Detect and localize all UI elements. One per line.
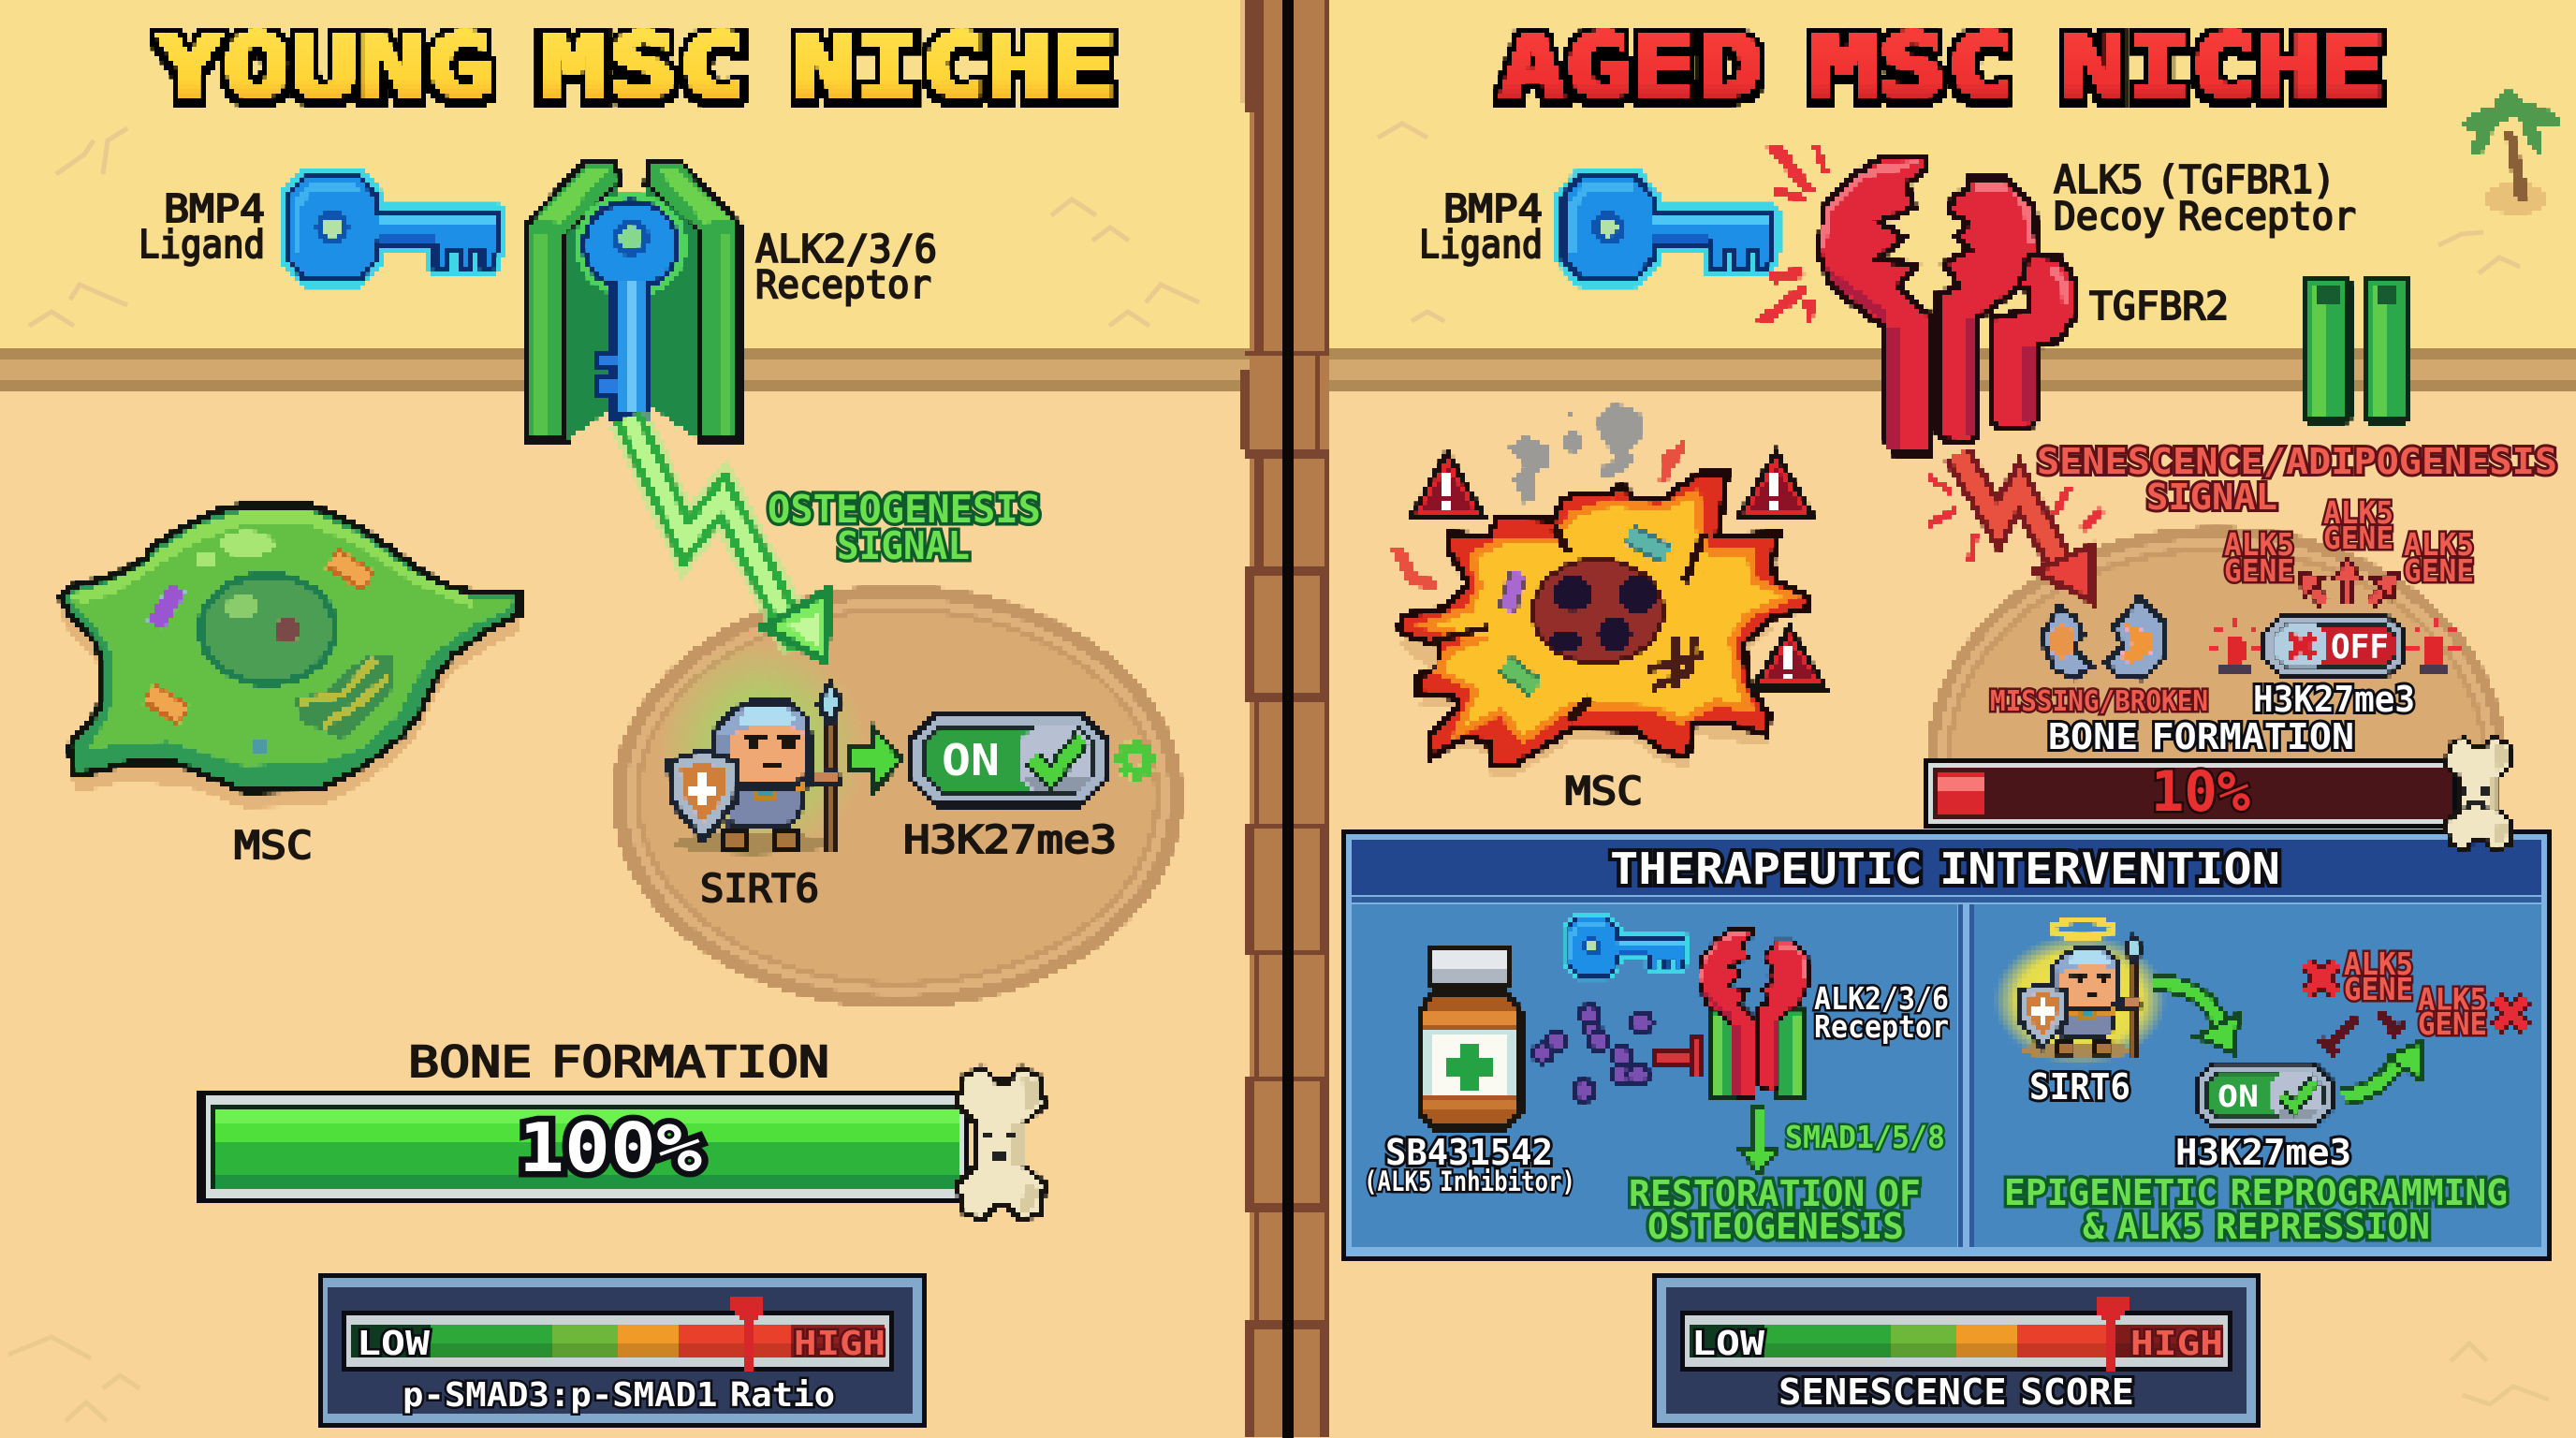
icon: gear bbox=[1114, 738, 1157, 781]
panel: young MSC niche bbox=[60, 16, 1183, 1429]
aged artwork layer bbox=[1392, 16, 2563, 1429]
label: ALK5 gene: ALK5 bbox=[2344, 946, 2413, 982]
aged labels layer: Ligand bbox=[1419, 222, 1543, 267]
label: H3K27me3: H3K27me3 bbox=[903, 817, 1117, 862]
label: H3K27me3: H3K27me3 bbox=[2175, 1132, 2351, 1173]
title: young MSC niche bbox=[155, 16, 1117, 116]
therapy labels layer: (ALK5 Inhibitor) bbox=[1364, 1166, 1575, 1197]
title: young MSC niche: YOUNG bbox=[155, 16, 493, 116]
label: epigenetic reprogramming: EPIGENETIC REPROGRAMMING bbox=[2004, 1172, 2508, 1213]
label: missing/broken: MISSING/BROKEN bbox=[1990, 685, 2208, 718]
therapy labels layer: OSTEOGENESIS bbox=[1647, 1206, 1904, 1247]
icon: warning triangle left bbox=[1407, 447, 1488, 520]
label: ALK5 gene right: ALK5 bbox=[2404, 526, 2474, 563]
icon: BMP4 key small bbox=[1567, 917, 1685, 976]
label: ALK5 gene middle: ALK5 bbox=[2323, 494, 2393, 531]
arrow: to SMAD1/5/8 bbox=[1739, 1107, 1778, 1174]
aged labels layer: GENE bbox=[2404, 552, 2474, 589]
therapy labels layer: GENE bbox=[2344, 971, 2413, 1007]
toggle: H3K27me3 off bbox=[2262, 613, 2408, 679]
label: SIRT6: SIRT6 bbox=[2029, 1066, 2130, 1108]
label: OFF: OFF bbox=[2331, 628, 2389, 667]
label: restoration of osteogenesis: RESTORATION OF bbox=[1629, 1173, 1921, 1214]
icon: palm tree bbox=[2460, 91, 2563, 214]
wooden divider bbox=[1239, 0, 1331, 1438]
icon: alarm left bbox=[2209, 618, 2261, 674]
icon: SIRT6 guardian bbox=[666, 677, 845, 855]
gauge: senescence score bbox=[1653, 1272, 2261, 1429]
icon: ALK2/3/6 receptor with key bbox=[526, 161, 739, 440]
gauge caption: SENESCENCE SCORE bbox=[1778, 1372, 2134, 1413]
therapy labels layer: & ALK5 REPRESSION bbox=[2083, 1206, 2430, 1247]
divider centre line bbox=[1282, 0, 1294, 1438]
label: bone formation: BONE FORMATION bbox=[408, 1037, 829, 1087]
icon: impact sparks bbox=[1755, 145, 1829, 326]
young labels layer: SIGNAL bbox=[837, 523, 970, 568]
aged labels layer: GENE bbox=[2224, 552, 2294, 589]
toggle: H3K27me3 on small bbox=[2194, 1061, 2334, 1130]
label: ALK5 decoy receptor: ALK5 (TGFBR1) bbox=[2054, 157, 2335, 202]
title: aged MSC niche: MSC bbox=[1809, 16, 2015, 116]
arrow: senescence signal lightning bbox=[1928, 454, 2101, 602]
title: aged MSC niche: AGED bbox=[1500, 16, 1763, 116]
title: young MSC niche: MSC bbox=[538, 16, 748, 116]
icon: broken SIRT6 pieces bbox=[2041, 597, 2166, 679]
label: ALK5 gene left: ALK5 bbox=[2224, 526, 2294, 563]
icon: warning triangle right bbox=[1734, 447, 1818, 520]
panel: therapeutic intervention bbox=[1341, 829, 2552, 1261]
icon: TGFBR2 receptor bbox=[1992, 256, 2075, 429]
icon: inhibitor molecules bbox=[1533, 1005, 1652, 1101]
title: aged MSC niche bbox=[1500, 16, 2385, 116]
label: receptor: ALK2/3/6 bbox=[1814, 980, 1949, 1017]
icon: BMP4 key bbox=[1563, 175, 1773, 280]
therapy artwork layer bbox=[1416, 917, 2525, 1174]
label: BMP4 ligand: BMP4 bbox=[1443, 186, 1543, 231]
gauge caption: p-SMAD3:p-SMAD1 Ratio bbox=[402, 1376, 835, 1415]
label: ON: ON bbox=[2217, 1078, 2259, 1114]
icon: SIRT6 halo aura bbox=[1994, 934, 2166, 1065]
icon: BMP4 key bbox=[287, 175, 497, 280]
icon: happy bone bbox=[957, 1067, 1045, 1221]
label: osteogenesis signal: OSTEOGENESIS bbox=[768, 487, 1041, 532]
label: SB431542: SB431542 bbox=[1385, 1132, 1553, 1173]
therapy labels layer: GENE bbox=[2418, 1005, 2487, 1042]
icon: up arrows bbox=[2298, 558, 2399, 604]
arrow: SIRT6 to H3K27me3 bbox=[2154, 983, 2239, 1053]
label: TGFBR2: TGFBR2 bbox=[2089, 284, 2229, 329]
label: toggle ON: ON bbox=[942, 735, 1000, 785]
bar: bone formation 100 percent bbox=[198, 1090, 970, 1204]
icon: SIRT6 halo bbox=[2053, 920, 2113, 937]
icon: warning triangle lower bbox=[1749, 623, 1830, 691]
therapy heading: THERAPEUTIC INTERVENTION bbox=[1610, 844, 2280, 894]
panel: aged MSC niche bbox=[1392, 16, 2563, 1429]
arrow: osteogenesis signal lightning bbox=[628, 418, 829, 661]
icon: senescent MSC cell bbox=[1399, 473, 1808, 777]
label: SIRT6: SIRT6 bbox=[700, 866, 819, 911]
icon: SIRT6 guardian small bbox=[2015, 931, 2144, 1059]
gauge low label: LOW bbox=[357, 1325, 430, 1363]
icon: damage sparks bbox=[1392, 440, 1685, 590]
icon: ALK5 decoy receptor bbox=[1819, 156, 2038, 454]
icon: smoke bbox=[1509, 403, 1643, 504]
gauge: p-SMAD ratio bbox=[316, 1272, 925, 1429]
icon: inhibition bar bbox=[1654, 1037, 1703, 1077]
label: BMP4 ligand: BMP4 bbox=[164, 186, 265, 231]
aged labels layer bbox=[1419, 157, 2557, 1413]
arrow: toggle to ALK5 gene bbox=[2343, 1042, 2422, 1097]
label: ALK5 gene second: ALK5 bbox=[2418, 981, 2487, 1018]
icon: red X marks bbox=[2306, 963, 2525, 1028]
label: senescence signal: SENESCENCE/ADIPOGENESIS bbox=[2037, 441, 2557, 482]
title: aged MSC niche: NICHE bbox=[2061, 16, 2385, 116]
therapy frame bbox=[1341, 829, 2552, 1261]
young labels layer bbox=[139, 186, 1117, 1415]
young labels layer: Ligand bbox=[139, 222, 265, 267]
icon: SB431542 bottle bbox=[1416, 946, 1524, 1131]
bar: bone formation 10 percent bbox=[1922, 758, 2459, 829]
arrow: SIRT6 to toggle bbox=[848, 726, 902, 792]
toggle: H3K27me3 on bbox=[908, 710, 1109, 809]
value: 100 percent: 100% bbox=[519, 1108, 702, 1187]
label: MSC: MSC bbox=[1565, 769, 1643, 814]
aged labels layer: Decoy Receptor bbox=[2054, 194, 2356, 239]
label: H3K27me3: H3K27me3 bbox=[2253, 679, 2415, 720]
panel: sirt6 niche circle bbox=[612, 585, 1183, 1008]
therapy labels layer bbox=[1364, 844, 2508, 1247]
label: SMAD1/5/8: SMAD1/5/8 bbox=[1785, 1119, 1945, 1155]
icon: empty green channel bbox=[2305, 279, 2409, 421]
therapy labels layer: Receptor bbox=[1814, 1008, 1949, 1045]
value: 10 percent: 10% bbox=[2151, 759, 2250, 825]
young artwork layer bbox=[60, 16, 1183, 1429]
icon: green aura bbox=[660, 641, 866, 857]
icon: repression markers bbox=[2320, 1013, 2405, 1055]
icon: MSC cell bbox=[60, 506, 520, 808]
icon: sad bone bbox=[2445, 737, 2512, 850]
aged labels layer: GENE bbox=[2323, 520, 2393, 556]
label: ALK2/3/6 receptor: ALK2/3/6 bbox=[755, 227, 937, 271]
gauge low label: LOW bbox=[1691, 1325, 1764, 1363]
gauge high label: HIGH bbox=[2130, 1325, 2223, 1363]
label: MSC: MSC bbox=[234, 823, 313, 868]
aged labels layer: SIGNAL bbox=[2146, 477, 2277, 518]
icon: alarm right bbox=[2408, 618, 2460, 674]
icon: ALK5 receptor restored bbox=[1700, 929, 1808, 1098]
panel: aged niche circle bbox=[1926, 526, 2507, 760]
young labels layer: Receptor bbox=[755, 262, 931, 307]
title: young MSC niche: NICHE bbox=[791, 16, 1117, 116]
label: bone formation: BONE FORMATION bbox=[2048, 716, 2354, 757]
gauge high label: HIGH bbox=[794, 1325, 886, 1363]
